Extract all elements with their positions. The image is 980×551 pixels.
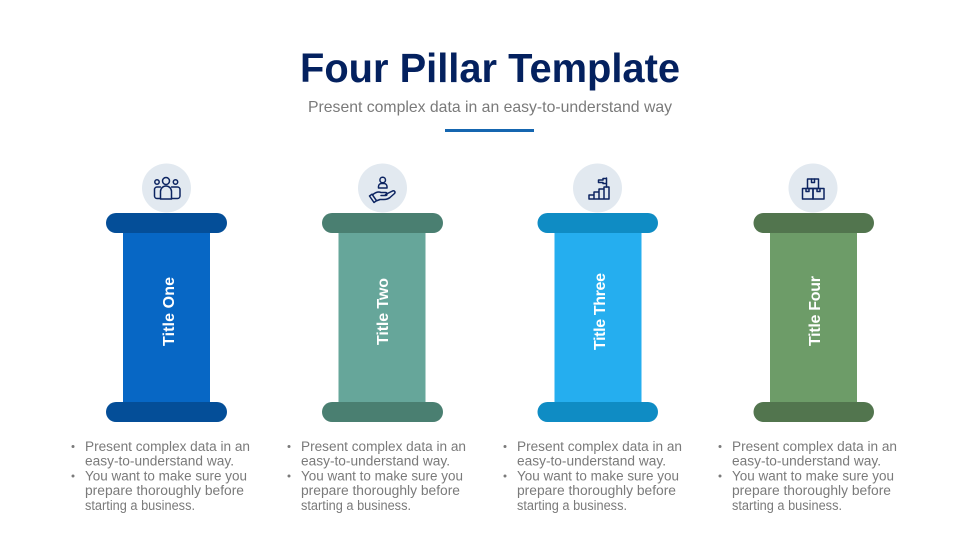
pillar 3 xyxy=(504,164,682,513)
pillar top cap xyxy=(322,213,443,233)
title: Four Pillar Template xyxy=(300,45,680,91)
pillar shaft xyxy=(123,233,210,402)
pillar 1 xyxy=(72,164,250,513)
pillar label: Title Four xyxy=(807,276,824,346)
pillar bottom cap xyxy=(754,402,874,422)
pillar top cap xyxy=(106,213,227,233)
pillar label: Title Two xyxy=(375,278,392,345)
pillar bottom cap xyxy=(538,402,658,422)
icon badge: stacked boxes xyxy=(788,164,838,212)
pillar bottom cap xyxy=(322,402,443,422)
pillar 2 xyxy=(288,164,466,513)
pillar 4 xyxy=(718,164,897,513)
pillar shaft xyxy=(554,233,642,402)
icon badge: people xyxy=(142,164,191,212)
bullet text xyxy=(288,439,466,513)
title underline xyxy=(445,129,534,132)
bullet text xyxy=(718,439,897,513)
pillar label: Title One xyxy=(161,277,178,346)
pillar label: Title Three xyxy=(592,273,609,350)
pillar top cap xyxy=(754,213,874,233)
icon badge: stairs with flag xyxy=(573,164,622,212)
pillar bottom cap xyxy=(106,402,227,422)
bullet text xyxy=(72,439,250,513)
pillar shaft xyxy=(770,233,857,402)
bullet text xyxy=(504,439,682,513)
pillar top cap xyxy=(538,213,658,233)
pillar shaft xyxy=(338,233,426,402)
icon badge: hand with person xyxy=(358,164,407,212)
subtitle: Present complex data in an easy-to-understand way xyxy=(308,99,672,116)
